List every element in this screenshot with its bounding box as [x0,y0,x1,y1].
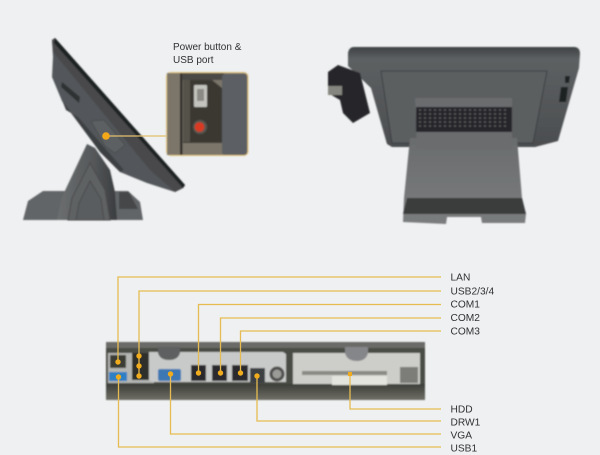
port labels: HDD [450,404,473,416]
DRW1 line [257,376,441,421]
port labels: USB1 [450,444,477,454]
DRW1 [250,368,265,383]
COM2 [212,365,227,381]
stand base [23,191,143,220]
vent grille [416,107,512,132]
latch [158,347,180,360]
callout label: Power button & [173,42,242,53]
speaker vent [61,82,80,103]
mounting bracket [328,65,370,123]
VGA connector [158,369,181,381]
LAN port [110,355,126,368]
callout line [106,135,166,137]
stand foot [403,138,526,224]
USB port [194,85,207,107]
connector lines [118,277,441,447]
LAN line [118,277,441,362]
right panel [222,74,247,155]
port labels: USB2/3/4 [450,286,494,298]
rear inner panel [381,71,547,143]
port labels: LAN [450,272,470,284]
rear view of terminal [328,47,580,224]
side port cover [91,120,125,153]
inset photo: power button and USB port [166,72,248,156]
port labels: COM3 [450,326,480,338]
port labels: COM2 [450,313,480,324]
monitor body [52,38,185,192]
red power button [193,120,207,134]
neck lower plate [418,132,511,149]
COM3 [232,365,248,381]
monitor rear shell [348,47,580,147]
COM1 line [198,304,441,373]
round power socket [270,366,284,382]
side view of terminal [23,38,185,220]
panel casing [106,342,425,400]
VGA line [170,374,441,434]
COM1 [191,365,206,381]
port labels: COM1 [450,300,480,310]
stand neck [415,98,512,149]
USB1 port blue [109,372,127,381]
panel strip [183,80,222,143]
right latch [345,347,368,361]
right silver plate [293,353,420,384]
COM3 line [240,331,441,373]
rear IO panel [106,342,425,400]
connector dots [115,353,352,380]
port labels: DRW1 [450,418,481,428]
callout label line 2: USB port [173,55,214,66]
centre silver plate [149,352,286,382]
lower back shadow [62,100,124,172]
HDD bay [332,376,387,385]
USB2/3/4 line [139,291,441,376]
USB1 line [118,377,441,447]
HDD line [350,374,441,409]
bezel band [52,38,185,192]
port labels [450,272,494,454]
front edge [54,38,185,188]
stand arm [57,144,117,220]
side ports [559,76,570,102]
right connector [400,367,418,383]
COM2 line [220,318,441,373]
USB2/3/4 ports [132,353,149,380]
bottom band [106,384,425,400]
callout dot [102,132,110,140]
left port plate [108,353,154,383]
port labels: VGA [450,430,472,442]
